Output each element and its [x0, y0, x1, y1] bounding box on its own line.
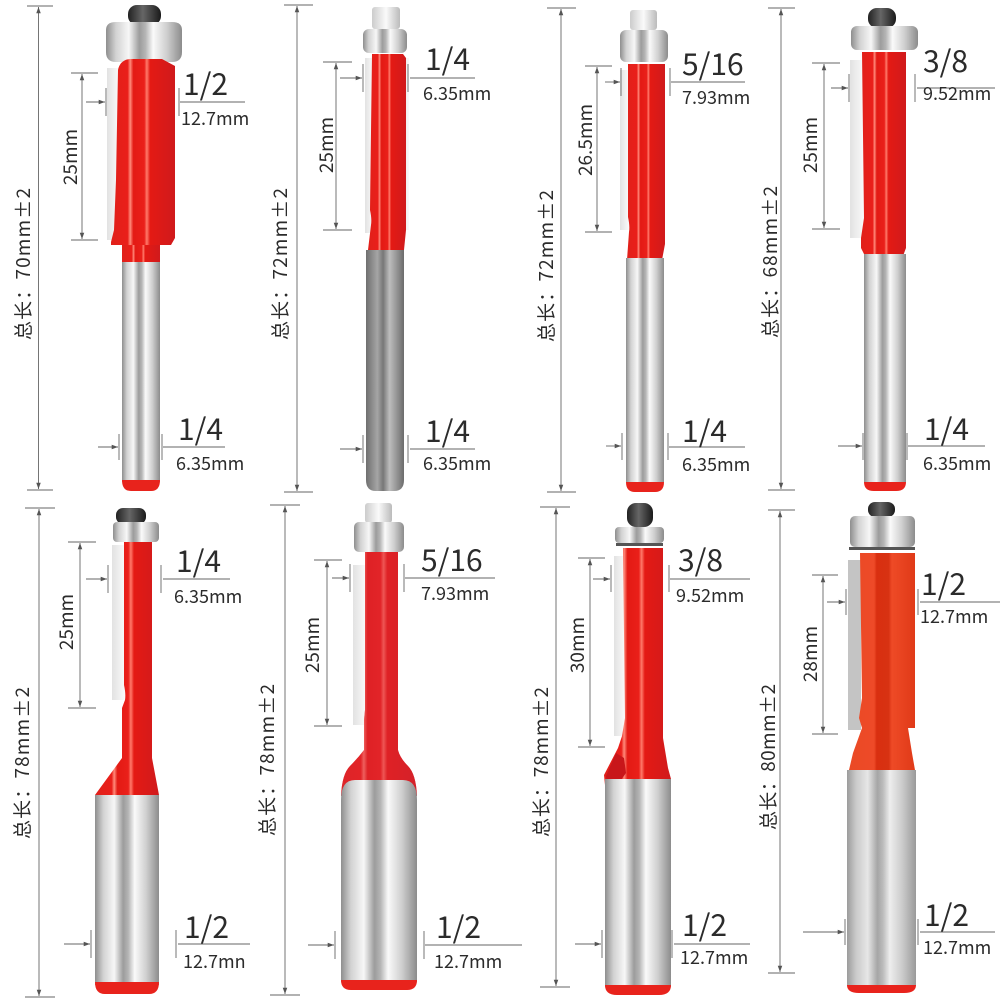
cutter diameter 3/8 9.52mm — [831, 37, 995, 106]
shank diameter 1/2 12.7mm: 12.7mm — [434, 948, 502, 974]
shank diameter 1/2 12.7mm: 1/2 — [682, 901, 727, 945]
total length dimension 72mm: 总长：72mm±2 — [266, 188, 293, 340]
total length dimension 70mm: 总长：70mm±2 — [9, 188, 36, 340]
cutter diameter 5/16 7.93mm: 5/16 — [682, 40, 744, 84]
cutter diameter 1/2 12.7mm: 12.7mm — [181, 105, 249, 131]
router bit 6 drawing — [341, 503, 417, 990]
cutter diameter 1/2 12.7mm: 12.7mm — [920, 603, 988, 629]
shank diameter 1/4 6.35mm: 6.35mm — [682, 451, 750, 477]
shank diameter 1/4 6.35mm: 1/4 — [425, 407, 470, 451]
shank diameter 1/2 12.7mm — [575, 901, 750, 970]
cutter diameter 5/16 7.93mm: 5/16 — [421, 536, 483, 580]
router bit 4 drawing — [850, 8, 918, 491]
cutter diameter 1/4 6.35mm — [340, 35, 491, 106]
cutter diameter 1/4 6.35mm: 6.35mm — [423, 80, 491, 106]
shank diameter 1/4 6.35mm — [340, 407, 491, 476]
panel: router bit 6 — [253, 503, 522, 995]
shank diameter 1/4 6.35mm: 1/4 — [682, 407, 727, 451]
total length dimension 78mm: 总长：78mm±2 — [253, 684, 280, 836]
shank diameter 1/4 6.35mm: 1/4 — [924, 405, 969, 449]
panel: router bit 3 — [532, 8, 750, 492]
cutting length 25mm: 25mm — [52, 594, 79, 650]
router bit 3 drawing — [620, 10, 668, 492]
shank diameter 1/2 12.7mm — [308, 903, 522, 974]
cutting length 25mm: 25mm — [56, 129, 83, 185]
cutter diameter 3/8 9.52mm: 9.52mm — [676, 582, 744, 608]
cutting length 28mm: 28mm — [796, 626, 823, 682]
cutting length 30mm: 30mm — [563, 617, 590, 673]
cutter diameter 1/2 12.7mm — [827, 560, 1000, 629]
router bit 8 drawing — [847, 502, 916, 993]
cutting length 25mm: 25mm — [796, 117, 823, 173]
cutter diameter 3/8 9.52mm: 9.52mm — [923, 80, 991, 106]
cutter diameter 3/8 9.52mm: 3/8 — [678, 536, 723, 580]
cutting length 25mm: 25mm — [298, 617, 325, 673]
cutter diameter 1/4 6.35mm: 6.35mm — [174, 583, 242, 609]
shank diameter 1/2 12.7mm: 12.7mm — [923, 934, 991, 960]
shank diameter 1/4 6.35mm: 6.35mm — [923, 450, 991, 476]
cutter diameter 5/16 7.93mm: 7.93mm — [682, 84, 750, 110]
shank diameter 1/2 12.7mm: 1/2 — [436, 903, 481, 947]
total length dimension 68mm: 总长：68mm±2 — [756, 186, 783, 338]
panel: router bit 1 — [9, 5, 249, 491]
shank diameter 1/2 12.7mm: 12.7mm — [680, 944, 748, 970]
shank diameter 1/4 6.35mm — [838, 405, 991, 476]
cutting length 26.5mm: 26.5mm — [571, 104, 598, 176]
cutter diameter 1/2 12.7mm — [86, 60, 249, 131]
total length dimension 78mm: 总长：78mm±2 — [8, 687, 35, 839]
panel: router bit 4 — [756, 8, 995, 491]
total length dimension 72mm: 总长：72mm±2 — [532, 190, 559, 342]
shank diameter 1/2 12.7mm: 12.7mn — [183, 948, 246, 974]
router bit 2 drawing — [363, 7, 409, 491]
shank diameter 1/4 6.35mm: 6.35mm — [423, 450, 491, 476]
cutter diameter 3/8 9.52mm — [593, 536, 750, 608]
cutter diameter 1/4 6.35mm: 1/4 — [176, 537, 221, 581]
panel: router bit 7 — [527, 503, 750, 995]
cutter diameter 3/8 9.52mm: 3/8 — [923, 37, 968, 81]
cutter diameter 5/16 7.93mm — [332, 536, 495, 606]
router bit 5 drawing — [95, 508, 159, 994]
router bit 7 drawing — [604, 503, 671, 995]
panel: router bit 2 — [266, 5, 491, 492]
shank diameter 1/4 6.35mm: 6.35mm — [176, 450, 244, 476]
shank diameter 1/2 12.7mm: 1/2 — [184, 903, 229, 947]
cutter diameter 1/2 12.7mm: 1/2 — [921, 560, 966, 604]
shank diameter 1/4 6.35mm — [606, 407, 750, 477]
total length dimension 80mm: 总长：80mm±2 — [754, 684, 781, 830]
shank diameter 1/2 12.7mm: 1/2 — [924, 891, 969, 935]
panel: router bit 8 — [754, 502, 1000, 993]
cutting length 25mm: 25mm — [312, 117, 339, 173]
shank diameter 1/2 12.7mm — [64, 903, 250, 974]
cutter diameter 1/4 6.35mm — [86, 537, 242, 609]
shank diameter 1/2 12.7mm — [803, 891, 995, 960]
panel: router bit 5 — [8, 508, 250, 997]
cutter diameter 1/4 6.35mm: 1/4 — [425, 35, 470, 79]
total length dimension 78mm: 总长：78mm±2 — [527, 687, 554, 837]
cutter diameter 1/2 12.7mm: 1/2 — [183, 60, 228, 104]
router bit 1 drawing — [106, 5, 182, 491]
shank diameter 1/4 6.35mm — [98, 405, 244, 476]
shank diameter 1/4 6.35mm: 1/4 — [178, 405, 223, 449]
cutter diameter 5/16 7.93mm: 7.93mm — [421, 580, 489, 606]
cutter diameter 5/16 7.93mm — [605, 40, 750, 110]
